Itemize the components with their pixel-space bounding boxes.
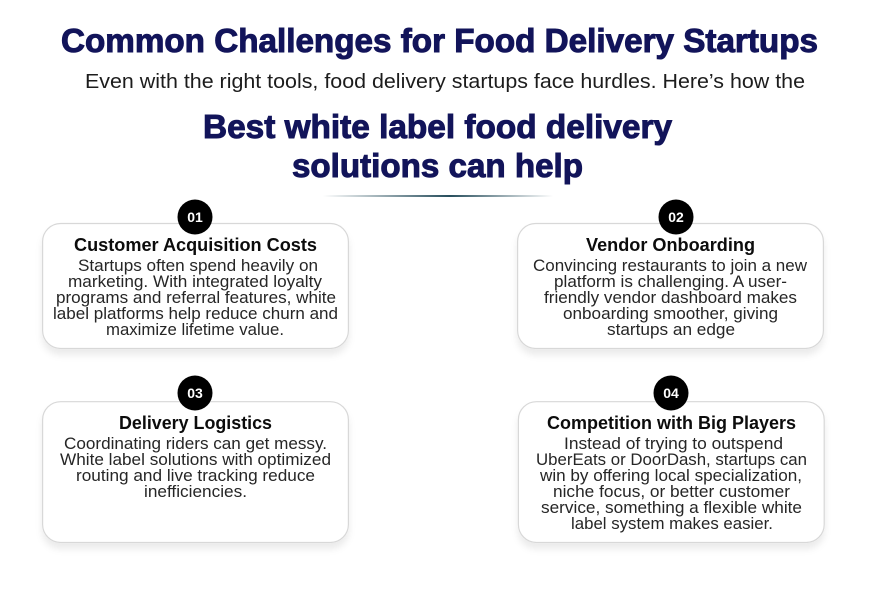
card text: competition with big players: niche focus, or better customer (553, 483, 791, 501)
card text: customer acquisition costs (53, 257, 338, 339)
card text: delivery logistics: routing and live tracking reduce (76, 467, 315, 485)
card heading: customer acquisition costs: Customer Acquisition Costs (74, 234, 317, 255)
title: Common Challenges for Food Delivery Startups (61, 22, 818, 59)
card heading: competition with big players: Competition with Big Players (547, 412, 796, 433)
card text: competition with big players: label system makes easier. (571, 515, 773, 533)
card text: competition with big players: UberEats or DoorDash, startups can (536, 451, 807, 469)
card text: competition with big players: Instead of trying to outspend (564, 435, 783, 453)
card text: vendor onboarding: Convincing restaurants to join a new (533, 257, 807, 275)
card text: vendor onboarding: platform is challenging. A user- (554, 273, 787, 291)
badge: 03 (178, 376, 212, 410)
card text: vendor onboarding: friendly vendor dashboard makes (544, 289, 797, 307)
card text: customer acquisition costs: Startups often spend heavily on (78, 257, 318, 275)
card heading: vendor onboarding: Vendor Onboarding (586, 234, 755, 255)
card text: delivery logistics: Coordinating riders can get messy. (64, 435, 327, 453)
card text: vendor onboarding: startups an edge (607, 321, 735, 339)
badge: 02 (658, 200, 694, 234)
card heading: delivery logistics: Delivery Logistics (119, 412, 272, 433)
subheading (203, 108, 673, 184)
divider (323, 195, 553, 197)
card text: delivery logistics (60, 435, 331, 501)
panel: vendor onboarding (518, 200, 823, 348)
badge: 02: 02 (668, 209, 684, 225)
card text: delivery logistics: inefficiencies. (144, 483, 247, 501)
card text: customer acquisition costs: programs and referral features, white (56, 289, 336, 307)
subheading: solutions can help (292, 147, 583, 184)
card text: competition with big players (536, 435, 807, 533)
badge: 03: 03 (187, 385, 203, 401)
panel: customer acquisition costs (43, 200, 348, 348)
card text: customer acquisition costs: marketing. With integrated loyalty (68, 273, 323, 291)
badge: 04: 04 (663, 385, 679, 401)
subheading: Best white label food delivery (203, 108, 673, 145)
card text: customer acquisition costs: maximize lifetime value. (106, 321, 284, 339)
card text: vendor onboarding: onboarding smoother, giving (563, 305, 778, 323)
card text: customer acquisition costs: label platforms help reduce churn and (53, 305, 338, 323)
card text: vendor onboarding (533, 257, 807, 339)
card text: delivery logistics: White label solutions with optimized (60, 451, 331, 469)
badge: 01 (178, 200, 212, 234)
card text: competition with big players: win by offering local specialization, (539, 467, 802, 485)
intro text: Even with the right tools, food delivery startups face hurdles. Here’s how the (85, 70, 805, 93)
panel: competition with big players (518, 376, 824, 542)
badge: 04 (654, 376, 688, 410)
badge: 01: 01 (187, 209, 203, 225)
card text: competition with big players: service, something a flexible white (541, 499, 802, 517)
panel: delivery logistics (43, 376, 348, 542)
